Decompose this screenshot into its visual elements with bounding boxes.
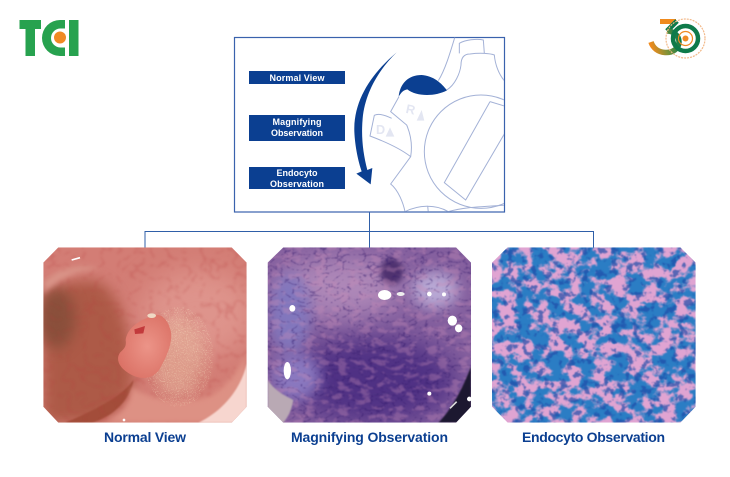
label: magnifying observation: Magnifying — [272, 117, 322, 127]
label: normal view: Normal View — [270, 73, 325, 83]
label: normal view — [249, 71, 345, 84]
connector lines — [145, 212, 594, 248]
endoscopy image: normal view — [38, 247, 255, 423]
label: magnifying observation — [249, 115, 345, 141]
dial letters R and D: D — [376, 123, 385, 137]
caption: endocyto observation: Endocyto Observation — [522, 429, 665, 445]
dial line drawing — [354, 38, 504, 212]
caption: magnifying observation: Magnifying Observation — [291, 429, 448, 445]
panel: mode selector dial — [234, 36, 506, 213]
dial letters R and D — [376, 102, 424, 137]
lever highlight — [399, 75, 447, 97]
label: endocyto observation — [249, 167, 345, 189]
endoscopy image: magnifying observation — [267, 247, 473, 423]
logo: 30th anniversary — [651, 19, 705, 58]
endoscopy image: endocyto observation — [492, 247, 698, 423]
label: magnifying observation: Observation — [271, 128, 323, 138]
label: endocyto observation: Endocyto — [276, 168, 318, 178]
logo: TCI — [20, 20, 78, 56]
rotation arrow — [354, 52, 397, 184]
dial letters R and D: R — [405, 102, 417, 118]
label: endocyto observation: Observation — [270, 179, 324, 189]
caption: normal view: Normal View — [104, 429, 186, 445]
